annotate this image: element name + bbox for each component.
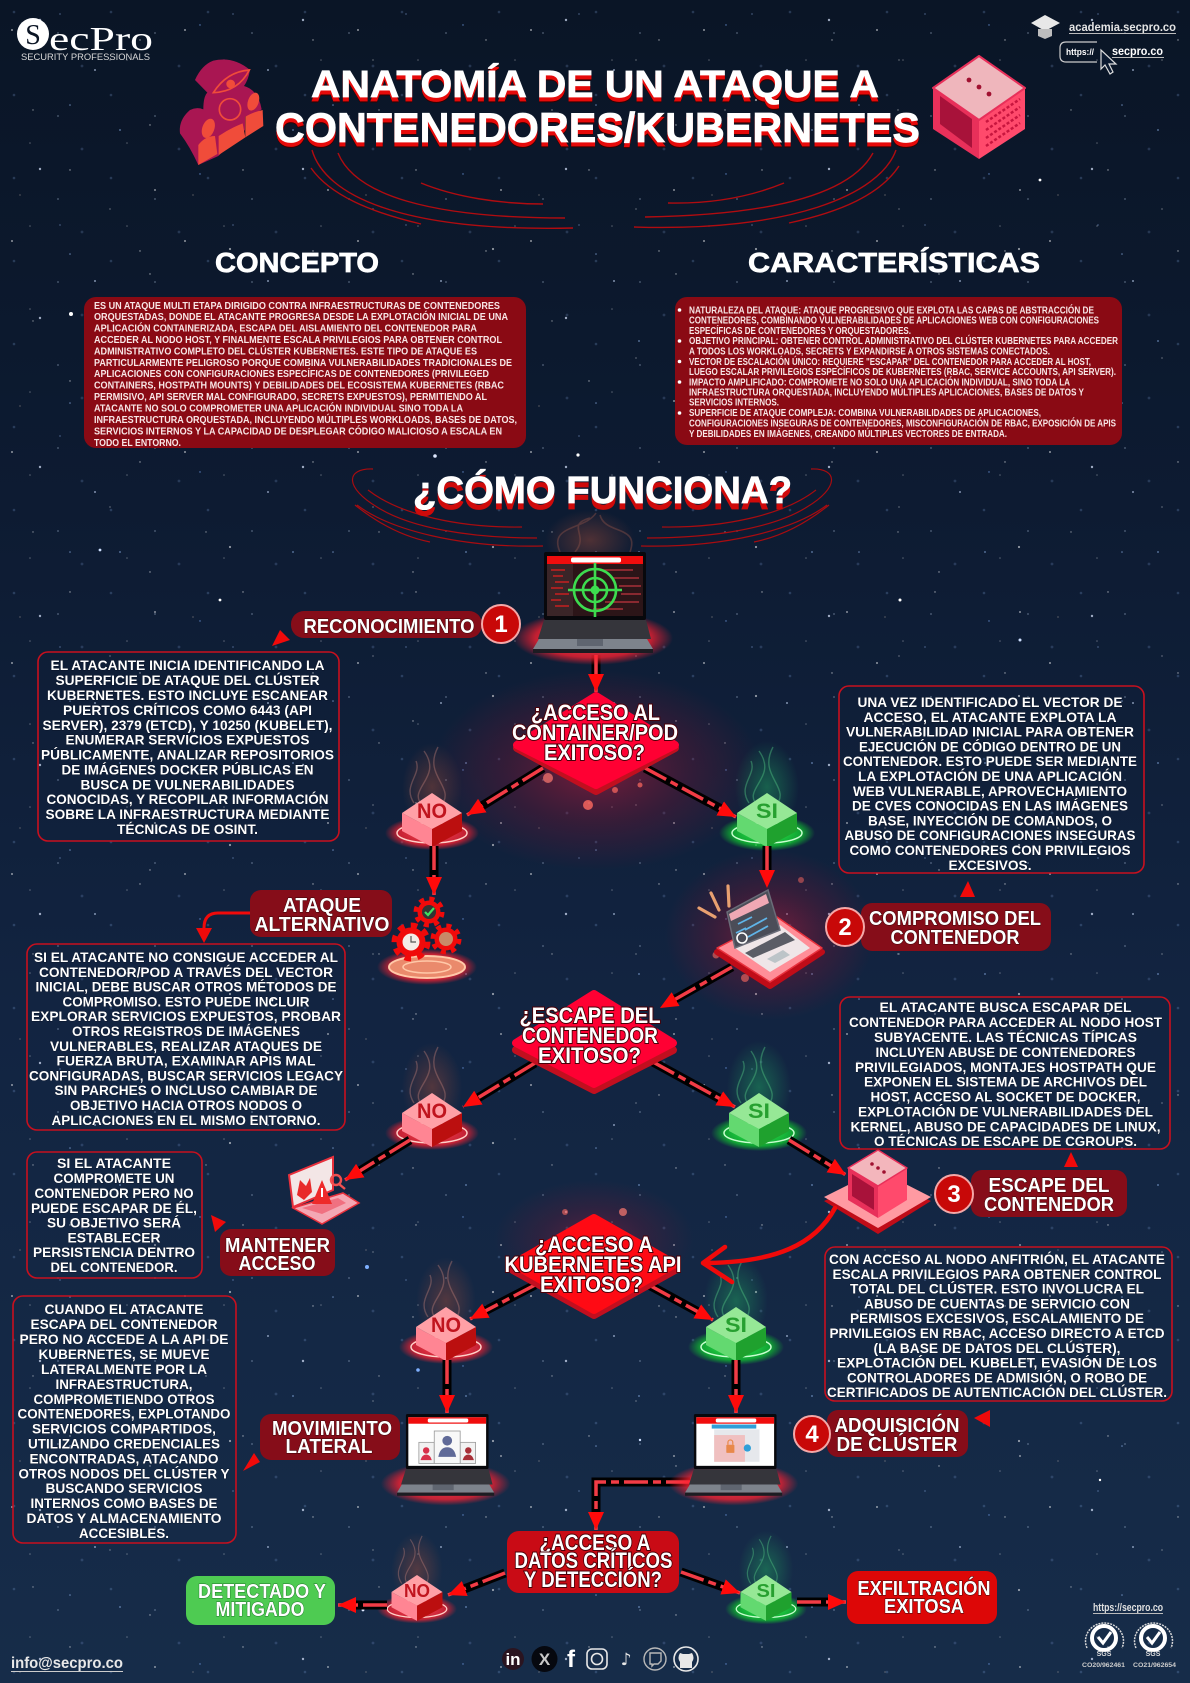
text block: mantener acceso: PUEDE ESCAPAR DE ÉL, xyxy=(31,1200,197,1216)
cube: no 4: NO xyxy=(404,1581,430,1601)
text block: compromiso: LA EXPLOTACIÓN DE UNA APLICACIÓN xyxy=(858,767,1122,784)
text block: reconocimiento: CONOCIDAS, Y RECOPILAR INFORMACIÓN xyxy=(46,790,328,807)
text block: compromiso: ACCESO, EL ATACANTE EXPLOTA LA xyxy=(864,709,1116,725)
panel: concepto: PERMISIVO, API SERVER MAL CONFIGURADO, SECRETS EXPUESTOS), PERMITIENDO AL xyxy=(94,392,487,403)
diamond: escape del contenedor: EXITOSO? xyxy=(538,1043,641,1068)
step 3: escape del contenedor: 3 xyxy=(947,1181,961,1208)
label: mantener acceso: MANTENER xyxy=(225,1235,331,1257)
logo: SecPro: S xyxy=(25,20,41,51)
text block: escape: EL ATACANTE BUSCA ESCAPAR DEL xyxy=(880,999,1132,1015)
icon: github xyxy=(674,1647,698,1671)
text block: mantener acceso: PERSISTENCIA DENTRO xyxy=(33,1244,195,1260)
text block: adquisición xyxy=(825,1247,1172,1401)
arrow: movimiento lateral to text xyxy=(243,1453,260,1471)
text block: movimiento lateral: PERO NO ACCEDE A LA API DE xyxy=(20,1331,228,1347)
icon: server cube xyxy=(933,56,1025,159)
text block: mantener acceso: SI EL ATACANTE xyxy=(57,1155,171,1171)
cube: si 1 xyxy=(719,741,815,851)
badge: SGS CO21: SGS xyxy=(1146,1651,1161,1658)
text block: ataque alternativo: OBJETIVO HACIA OTROS NODOS O xyxy=(70,1097,302,1113)
certification badges xyxy=(1082,1623,1176,1669)
label: movimiento lateral: LATERAL xyxy=(286,1436,372,1458)
text block: escape: SUBYACENTE. LAS TÉCNICAS TÍPICAS xyxy=(874,1029,1137,1045)
step 2: compromiso del contenedor: COMPROMISO DEL xyxy=(869,908,1041,930)
text block: movimiento lateral: DATOS Y ALMACENAMIENTO xyxy=(26,1510,222,1526)
website link with cursor: https:// xyxy=(1066,47,1094,58)
label: movimiento lateral: MOVIMIENTO xyxy=(272,1418,392,1440)
label: mantener acceso xyxy=(220,1229,335,1276)
panel: concepto: PARTICULARMENTE PELIGROSO PORQUE COMBINA VULNERABILIDADES TRADICIONALES DE xyxy=(94,358,512,369)
panel: concepto: SERVICIOS INTERNOS Y LA CAPACIDAD DE DESPLEGAR CÓDIGO MALICIOSO A ESCALA EN xyxy=(94,424,502,438)
text block: ataque alternativo: APLICACIONES EN EL MISMO ENTORNO. xyxy=(52,1112,320,1128)
step 3: escape del contenedor: CONTENEDOR xyxy=(984,1194,1115,1216)
icon: compromised isometric laptop xyxy=(699,886,822,986)
label: ataque alternativo xyxy=(250,890,392,937)
panel: características: INFRAESTRUCTURA ORQUESTADA, INCLUYENDO MÚLTIPLES APLICACIONES, BASES DE DATOS Y xyxy=(689,386,1084,398)
step 4: adquisición de clúster xyxy=(794,1410,968,1457)
text block: compromiso: ABUSO DE CONFIGURACIONES INSEGURAS xyxy=(844,827,1136,843)
icon: linkedin xyxy=(502,1648,524,1670)
text block: reconocimiento: TÉCNICAS DE OSINT. xyxy=(117,821,258,837)
arrow: compromiso to text xyxy=(960,881,975,897)
text block: movimiento lateral: ACCESIBLES. xyxy=(79,1525,169,1541)
text block: reconocimiento: PÚBLICAMENTE, ANALIZAR REPOSITORIOS xyxy=(41,746,334,762)
arrow: adquisición to text xyxy=(974,1410,990,1427)
cube: no 1 xyxy=(385,743,479,850)
text block: mantener acceso: COMPROMETE UN xyxy=(54,1170,174,1186)
diamond: escape del contenedor: CONTENEDOR xyxy=(522,1023,658,1048)
icon: laptop adquisición de clúster xyxy=(669,1414,798,1506)
text block: ataque alternativo: INICIAL, DEBE BUSCAR OTROS MÉTODOS DE xyxy=(36,978,336,994)
icon: x: X xyxy=(539,1650,551,1669)
title: ANATOMÍA DE UN ATAQUE A xyxy=(311,62,879,106)
text block: movimiento lateral: LATERALMENTE POR LA xyxy=(41,1361,207,1377)
text block: movimiento lateral: COMPROMETIENDO OTROS xyxy=(34,1391,214,1407)
text block: reconocimiento: EL ATACANTE INICIA IDENTIFICANDO LA xyxy=(50,657,324,673)
step 2: compromiso del contenedor: CONTENEDOR xyxy=(890,927,1020,949)
text block: ataque alternativo: FUERZA BRUTA, EXAMINAR APIS MAL xyxy=(56,1052,316,1068)
text block: mantener acceso: DEL CONTENEDOR. xyxy=(50,1259,178,1275)
text block: movimiento lateral: OTROS NODOS DEL CLÚSTER Y xyxy=(18,1464,230,1482)
text block: escape xyxy=(840,997,1170,1149)
footer link: https://secpro.co xyxy=(1093,1602,1163,1614)
outcome: detectado y mitigado: DETECTADO Y xyxy=(198,1581,327,1603)
decision box: datos críticos: DATOS CRÍTICOS xyxy=(514,1548,672,1573)
website link with cursor: secpro.co xyxy=(1112,46,1163,58)
step 1: reconocimiento: RECONOCIMIENTO xyxy=(304,616,474,638)
title xyxy=(275,62,920,151)
panel: características: NATURALEZA DEL ATAQUE: ATAQUE PROGRESIVO QUE EXPLOTA LAS CAPAS DE ABSTRACCIÓN DE xyxy=(689,304,1094,316)
step 4: adquisición de clúster: 4 xyxy=(805,1421,819,1448)
panel: características: A TODOS LOS WORKLOADS, SECRETS Y EXPANDIRSE A OTROS SISTEMAS CONECTADOS. xyxy=(689,346,1050,358)
arrow: escape to text xyxy=(1064,1152,1078,1167)
text block: compromiso: DE CVES CONOCIDAS EN LAS IMÁGENES xyxy=(852,798,1128,814)
step 2: compromiso del contenedor xyxy=(826,903,1051,951)
text block: movimiento lateral: INFRAESTRUCTURA, xyxy=(56,1376,192,1392)
panel: concepto: ORQUESTADAS, DONDE EL ATACANTE PROGRESA DESDE LA EXPLOTACIÓN INICIAL DE UNA xyxy=(94,310,508,323)
panel: concepto: ADMINISTRATIVO COMPLETO DEL CLÚSTER KUBERNETES. ESTE TIPO DE ATAQUE ES xyxy=(94,344,477,358)
diamond: acceso al container xyxy=(512,696,678,791)
decision box: datos críticos: Y DETECCIÓN? xyxy=(524,1567,662,1592)
text block: adquisición: ABUSO DE CUENTAS DE SERVICIO CON xyxy=(864,1296,1130,1312)
text block: ataque alternativo xyxy=(27,944,345,1130)
logo: SecPro: SECURITY PROFESSIONALS xyxy=(21,52,150,62)
diamond: escape del contenedor xyxy=(516,994,673,1090)
text block: ataque alternativo: COMPROMISO. ESTO PUEDE INCLUIR xyxy=(62,994,310,1010)
text block: escape: INCLUYEN ABUSE DE CONTENEDORES xyxy=(876,1044,1136,1060)
cube: si 1: SI xyxy=(756,800,778,823)
text block: mantener acceso: CONTENEDOR PERO NO xyxy=(34,1185,194,1201)
text block: escape: PRIVILEGIADOS, MONTAJES HOSTPATH QUE xyxy=(855,1059,1156,1075)
panel: características: IMPACTO AMPLIFICADO: COMPROMETE NO SOLO UNA APLICACIÓN INDIVIDUAL, SINO TODA LA xyxy=(689,376,1070,388)
icon: instagram xyxy=(587,1649,607,1669)
text block: movimiento lateral xyxy=(13,1296,236,1543)
text block: adquisición: CON ACCESO AL NODO ANFITRIÓN, EL ATACANTE xyxy=(829,1250,1165,1267)
text block: reconocimiento: PUERTOS CRÍTICOS COMO 6443 (API xyxy=(63,702,312,718)
text block: escape: HOST, ACCESO AL SOCKET DE DOCKER, xyxy=(870,1088,1140,1104)
diamond: acceso a kubernetes api: KUBERNETES API xyxy=(504,1252,682,1277)
text block: reconocimiento: BUSCA DE VULNERABILIDADES xyxy=(80,776,294,792)
icon: laptop with target xyxy=(513,552,673,665)
outcome: exfiltración exitosa xyxy=(847,1571,997,1624)
text block: movimiento lateral: BUSCANDO SERVICIOS xyxy=(46,1480,202,1496)
text block: reconocimiento: SOBRE LA INFRAESTRUCTURA MEDIANTE xyxy=(46,806,330,822)
text block: compromiso: BASE, INYECCIÓN DE COMANDOS, O xyxy=(868,812,1112,828)
icon: tiktok: ♪ xyxy=(621,1650,631,1670)
panel: características: Y DEBILIDADES EN IMÁGENES, CREANDO MÚLTIPLES VECTORES DE ENTRADA. xyxy=(689,427,1007,440)
text block: reconocimiento xyxy=(38,652,339,841)
text block: reconocimiento: ENUMERAR SERVICIOS EXPUESTOS xyxy=(66,732,310,748)
panel: concepto: ACCEDER AL NODO HOST, Y FINALMENTE ESCALA PRIVILEGIOS PARA OBTENER CONTROL xyxy=(94,335,502,346)
text block: movimiento lateral: CUANDO EL ATACANTE xyxy=(44,1301,204,1317)
cube: no 1: NO xyxy=(417,800,447,823)
outcome: exfiltración exitosa: EXFILTRACIÓN xyxy=(858,1576,990,1600)
decision box: datos críticos xyxy=(507,1530,679,1593)
heading: concepto: CONCEPTO xyxy=(215,247,379,278)
panel: características: VECTOR DE ESCALACIÓN ÚNICO: REQUIERE "ESCAPAR" DEL CONTENEDOR PARA ACCEDER AL HOST, xyxy=(689,355,1091,368)
icon: twitch xyxy=(644,1648,666,1670)
text block: mantener acceso: SU OBJETIVO SERÁ xyxy=(47,1214,181,1230)
panel: concepto: ATACANTE NO SOLO COMPROMETER UNA APLICACIÓN INDIVIDUAL SINO TODA LA xyxy=(94,402,463,414)
diamond: escape del contenedor: ¿ESCAPE DEL xyxy=(520,1003,660,1028)
cube: si 3 xyxy=(688,1255,784,1365)
step 4: adquisición de clúster: DE CLÚSTER xyxy=(836,1432,958,1456)
text block: escape: KERNEL, ABUSO DE CAPACIDADES DE LINUX, xyxy=(850,1118,1160,1134)
text block: ataque alternativo: OTROS REGISTROS DE IMÁGENES xyxy=(72,1023,300,1039)
badge: SGS CO21 xyxy=(1133,1623,1176,1669)
text block: compromiso: CONTENEDOR. ESTO PUEDE SER MEDIANTE xyxy=(843,753,1137,769)
text block: escape: O TÉCNICAS DE ESCAPE DE CGROUPS. xyxy=(874,1133,1137,1149)
label: movimiento lateral xyxy=(260,1414,400,1460)
icon: smoke above first laptop xyxy=(545,510,635,570)
label: ataque alternativo: ALTERNATIVO xyxy=(254,914,390,936)
text block: movimiento lateral: ESCAPA DEL CONTENEDOR xyxy=(30,1316,218,1332)
text block: escape: CONTENEDOR PARA ACCEDER AL NODO HOST xyxy=(849,1014,1162,1030)
red nebula glows xyxy=(431,670,875,1300)
text block: ataque alternativo: CONFIGURADAS, BUSCAR SERVICIOS LEGACY xyxy=(29,1068,344,1084)
text block: adquisición: CONTROLADORES DE ADMISIÓN, O ROBO DE xyxy=(847,1368,1147,1386)
text block: adquisición: (LA BASE DE DATOS DEL CLÚSTER), xyxy=(874,1339,1120,1356)
cube: si 4: SI xyxy=(756,1581,776,1601)
text block: ataque alternativo: EXPLORAR SERVICIOS EXPUESTOS, PROBAR xyxy=(31,1008,341,1024)
panel: concepto: ES UN ATAQUE MULTI ETAPA DIRIGIDO CONTRA INFRAESTRUCTURAS DE CONTENEDORES xyxy=(94,301,500,312)
diamond: acceso a kubernetes api: ¿ACCESO A xyxy=(535,1232,653,1257)
icon: server on platform xyxy=(824,1150,931,1234)
panel: concepto xyxy=(84,297,526,449)
badge: SGS CO20: SGS xyxy=(1097,1651,1112,1658)
cube: si 4 xyxy=(725,1531,807,1624)
panel: concepto: INFRAESTRUCTURA ORQUESTADA, INCLUYENDO MÚLTIPLES WORKLOADS, BASES DE DATOS, xyxy=(94,413,517,426)
title: CONTENEDORES/KUBERNETES xyxy=(275,104,920,151)
website link with cursor xyxy=(1060,42,1164,74)
text block: escape: EXPLOTACIÓN DE VULNERABILIDADES DEL xyxy=(858,1102,1153,1120)
panel: características xyxy=(675,297,1122,445)
arrow: ataque alternativo to text xyxy=(196,913,250,943)
diamond: acceso al container: ¿ACCESO AL xyxy=(531,700,660,725)
curved arrow: escape to kubernetes api xyxy=(703,1208,835,1282)
text block: adquisición: PRIVILEGIOS EN RBAC, ACCESO DIRECTO A ETCD xyxy=(830,1325,1164,1341)
text block: adquisición: CERTIFICADOS DE AUTENTICACIÓN DEL CLÚSTER. xyxy=(827,1383,1167,1400)
text block: adquisición: EXPLOTACIÓN DEL KUBELET, EVASIÓN DE LOS xyxy=(837,1354,1157,1370)
text block: compromiso: UNA VEZ IDENTIFICADO EL VECTOR DE xyxy=(858,694,1122,710)
panel: características: SERVICIOS INTERNOS. xyxy=(689,398,779,408)
academy link with graduation cap: academia.secpro.co xyxy=(1069,20,1176,34)
decorative swoosh arcs under the title xyxy=(311,150,899,228)
outcome: exfiltración exitosa: EXITOSA xyxy=(884,1596,964,1618)
text block: reconocimiento: KUBERNETES. ESTO INCLUYE ESCANEAR xyxy=(47,687,328,703)
step 1: reconocimiento: 1 xyxy=(494,611,508,638)
panel: concepto: APLICACIONES CON CONFIGURACIONES ESPECÍFICAS DE CONTENEDORES (PRIVILEGED xyxy=(94,367,489,380)
badge: SGS CO20: CO20/962461 xyxy=(1082,1662,1125,1669)
cube: si 2: SI xyxy=(748,1100,770,1123)
label: mantener acceso: ACCESO xyxy=(238,1253,316,1275)
step 4: adquisición de clúster: ADQUISICIÓN xyxy=(834,1413,960,1437)
text block: movimiento lateral: INTERNOS COMO BASES DE xyxy=(30,1495,218,1511)
cube: si 2 xyxy=(711,1041,807,1151)
text block: escape: EXPONEN EL SISTEMA DE ARCHIVOS DEL xyxy=(864,1074,1147,1090)
arrow: reconocimiento to text xyxy=(272,630,290,646)
text block: adquisición: PERMISOS EXCESIVOS, ESCALAMIENTO DE xyxy=(850,1310,1144,1326)
text block: adquisición: ESCALA PRIVILEGIOS PARA OBTENER CONTROL xyxy=(832,1266,1162,1282)
panel: características: CONTENEDORES, COMBINANDO VULNERABILIDADES DE APLICACIONES WEB CON CONFIGURACIONES xyxy=(689,316,1099,326)
text block: movimiento lateral: CONTENEDORES, EXPLOTANDO xyxy=(18,1406,231,1422)
arrow: mantener acceso to text xyxy=(211,1215,226,1232)
heading: características: CARACTERÍSTICAS xyxy=(748,247,1040,278)
cube: no 2 xyxy=(385,1043,479,1150)
outcome: detectado y mitigado xyxy=(186,1576,335,1625)
cube: no 3 xyxy=(399,1257,493,1364)
icon: facebook: f xyxy=(567,1646,576,1673)
step 3: escape del contenedor xyxy=(935,1170,1127,1217)
cube: no 2: NO xyxy=(417,1100,447,1123)
decision box: datos críticos: ¿ACCESO A xyxy=(540,1530,651,1555)
NO / SI decision cubes xyxy=(377,741,815,1624)
label: ataque alternativo: ATAQUE xyxy=(283,895,361,917)
badge: SGS CO20 xyxy=(1082,1623,1125,1669)
flow arrows xyxy=(338,655,846,1605)
diamond: acceso a kubernetes api xyxy=(504,1218,682,1315)
text block: movimiento lateral: KUBERNETES, SE MUEVE xyxy=(38,1346,210,1362)
cube: si 3: SI xyxy=(725,1314,747,1337)
text block: reconocimiento: SERVER), 2379 (ETCD), Y 10250 (KUBELET), xyxy=(42,717,332,733)
text block: ataque alternativo: SIN PARCHES O INCLUSO CAMBIAR DE xyxy=(54,1082,318,1098)
text block: compromiso: VULNERABILIDAD INICIAL PARA OBTENER xyxy=(846,724,1134,740)
text block: ataque alternativo: CONTENEDOR/POD A TRAVÉS DEL VECTOR xyxy=(39,964,333,980)
step 3: escape del contenedor: ESCAPE DEL xyxy=(988,1175,1110,1197)
icon: gears and ring xyxy=(377,899,477,985)
icon: people with eye xyxy=(180,59,263,165)
diamond: acceso al container: CONTAINER/POD xyxy=(512,720,678,745)
text block: reconocimiento: SUPERFICIE DE ATAQUE DEL CLÚSTER xyxy=(56,671,320,688)
step 2: compromiso del contenedor: 2 xyxy=(838,914,852,941)
panel: concepto: TODO EL ENTORNO. xyxy=(94,438,181,449)
text block: reconocimiento: DE IMÁGENES DOCKER PÚBLICAS EN xyxy=(62,760,314,778)
text block: mantener acceso xyxy=(27,1152,202,1278)
text block: movimiento lateral: ENCONTRADAS, ATACANDO xyxy=(30,1450,219,1466)
academy link with graduation cap xyxy=(1031,15,1176,39)
panel: concepto: CONTAINERS, HOSTPATH MOUNTS) Y DEBILIDADES DEL ECOSISTEMA KUBERNETES (RBAC xyxy=(94,380,504,392)
cube: no 3: NO xyxy=(431,1314,461,1337)
swoosh arcs around how-it-works heading xyxy=(352,469,832,546)
icon: mantener acceso laptop xyxy=(289,1157,359,1224)
social media icons xyxy=(502,1646,698,1673)
text block: compromiso: EJECUCIÓN DE CÓDIGO DENTRO DE UN xyxy=(859,738,1121,754)
icon: linkedin: in xyxy=(505,1650,521,1669)
text block: mantener acceso: ESTABLECER xyxy=(68,1230,160,1246)
text block: compromiso: COMO CONTENEDORES CON PRIVILEGIOS xyxy=(850,842,1130,858)
diamond: acceso al container: EXITOSO? xyxy=(544,740,645,765)
logo: SecPro xyxy=(17,18,153,62)
badge: SGS CO21: CO21/962654 xyxy=(1133,1662,1176,1669)
icon: laptop movimiento lateral xyxy=(381,1414,510,1506)
text block: movimiento lateral: UTILIZANDO CREDENCIALES xyxy=(28,1436,220,1452)
outcome: detectado y mitigado: MITIGADO xyxy=(216,1599,304,1621)
contact email: info@secpro.co xyxy=(11,1655,123,1672)
text block: movimiento lateral: SERVICIOS COMPARTIDOS, xyxy=(32,1420,216,1436)
text block: ataque alternativo: VULNERABLES, REALIZAR ATAQUES DE xyxy=(50,1038,322,1054)
panel: características: SUPERFICIE DE ATAQUE COMPLEJA: COMBINA VULNERABILIDADES DE APLICACIONES, xyxy=(689,408,1041,419)
text block: compromiso: WEB VULNERABLE, APROVECHAMIENTO xyxy=(853,783,1127,799)
text block: adquisición: TOTAL DEL CLÚSTER. ESTO INVOLUCRA EL xyxy=(850,1280,1144,1296)
panel: características: ESPECÍFICAS DE CONTENEDORES Y ORQUESTADORES. xyxy=(689,324,911,337)
cube: no 4 xyxy=(377,1532,457,1623)
icon: x xyxy=(532,1646,558,1672)
diamond: acceso a kubernetes api: EXITOSO? xyxy=(540,1272,643,1297)
text block: compromiso xyxy=(839,686,1144,873)
text block: ataque alternativo: SI EL ATACANTE NO CONSIGUE ACCEDER AL xyxy=(34,949,338,965)
logo: SecPro: ecPro xyxy=(49,21,153,58)
text block: compromiso: EXCESIVOS. xyxy=(948,857,1032,873)
step 1: reconocimiento xyxy=(291,605,520,643)
heading: cómo funciona: ¿CÓMO FUNCIONA? xyxy=(413,468,792,512)
panel: concepto: APLICACIÓN CONTAINERIZADA, ESCAPA DEL AISLAMIENTO DEL CONTENEDOR PARA xyxy=(94,322,477,334)
